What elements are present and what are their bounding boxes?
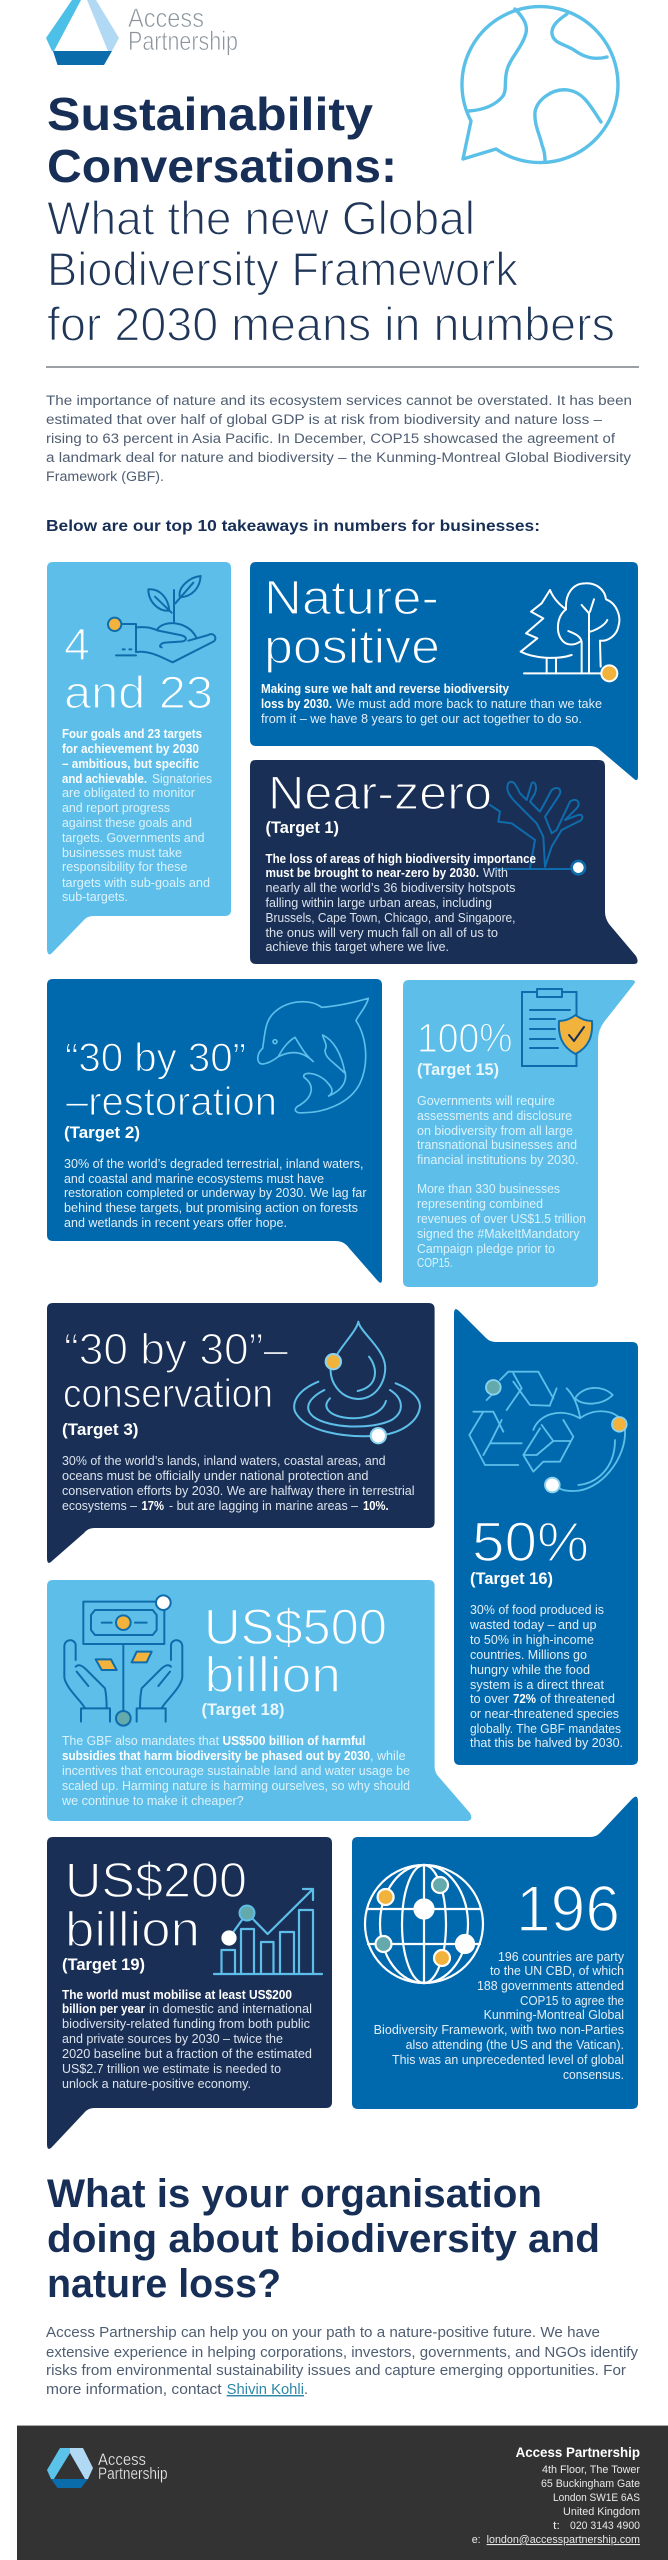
- heading: 30 by 30 restoration: –restoration: [66, 1080, 277, 1124]
- body text: and coastal and marine ecosystems must have: [64, 1172, 324, 1186]
- body text: 72%: [513, 1692, 536, 1706]
- body text: [266, 852, 536, 954]
- icon: globe with nodes: [365, 1865, 483, 1983]
- intro paragraph: a landmark deal for nature and biodiversity – the Kunming-Montreal Global Biodiversity: [46, 450, 631, 465]
- body text: in domestic and international: [149, 2002, 312, 2016]
- body text: achieve this target where we live.: [266, 940, 449, 954]
- body text: Campaign pledge prior to: [417, 1242, 555, 1256]
- title: What the new Global: [47, 192, 475, 244]
- body text: are obligated to monitor: [62, 786, 195, 800]
- body text: 10%.: [363, 1499, 389, 1513]
- body text: businesses must take: [62, 846, 182, 860]
- body text: nearly all the world’s 36 biodiversity hotspots: [266, 881, 516, 895]
- heading: Nature-positive: [264, 572, 440, 674]
- footer contact details: 65 Buckingham Gate: [541, 2478, 640, 2490]
- footer contact details: [472, 2445, 640, 2546]
- body text: also attending (the US and the Vatican).: [406, 2038, 624, 2052]
- icon: rising bar chart: [214, 1889, 322, 1974]
- body text: hungry while the food: [470, 1663, 590, 1677]
- panel: US$200 billion: [47, 1837, 332, 2149]
- body text: The GBF also mandates that: [62, 1734, 220, 1748]
- body text: 2020 baseline but a fraction of the estimated: [62, 2047, 312, 2061]
- body text: falling within large urban areas, including: [266, 896, 492, 910]
- icon: clipboard and shield: [522, 989, 592, 1066]
- target label: (Target 1): [266, 818, 339, 837]
- body text: [62, 727, 212, 904]
- heading: US$200 billion: US$200: [65, 1854, 247, 1908]
- heading: 4 and 23: 4: [64, 619, 90, 670]
- body text: and private sources by 2030 – twice the: [62, 2032, 283, 2046]
- body text: countries. Millions go: [470, 1648, 587, 1662]
- body text: behind these targets, but promising action on forests: [64, 1201, 358, 1215]
- icon: globe speech bubble: [462, 7, 618, 163]
- body text: to over: [470, 1692, 509, 1706]
- closing paragraph: extensive experience in helping corporations, investors, governments, and NGOs identify: [46, 2345, 639, 2361]
- footer contact details: 020 3143 4900: [570, 2520, 640, 2532]
- panel: 50%: [454, 1309, 638, 1765]
- body text: targets. Governments and: [62, 831, 205, 845]
- panel: Nature-positive: [250, 562, 638, 780]
- body text: The world must mobilise at least US$200: [62, 1988, 292, 2002]
- body text: restoration completed or underway by 2030. We lag far: [64, 1186, 366, 1200]
- body text: that this be halved by 2030.: [470, 1736, 623, 1750]
- body text: sub-targets.: [62, 890, 128, 904]
- title: [47, 88, 615, 350]
- heading: US$500 billion: [204, 1599, 387, 1703]
- body text: financial institutions by 2030.: [417, 1153, 579, 1167]
- heading: US$200 billion: [65, 1854, 247, 1957]
- heading: US$200 billion: billion: [65, 1903, 200, 1957]
- body text: to the UN CBD, of which: [490, 1964, 624, 1978]
- title: Biodiversity Framework: [47, 242, 518, 296]
- footer logo: Access: [98, 2450, 146, 2469]
- body text: 30% of food produced is: [470, 1603, 604, 1617]
- body text: Making sure we halt and reverse biodiversity: [261, 682, 509, 696]
- body text: for achievement by 2030: [62, 742, 199, 756]
- body text: and report progress: [62, 801, 170, 815]
- closing heading: doing about biodiversity and: [47, 2217, 600, 2261]
- target label: (Target 3): [62, 1420, 138, 1439]
- closing heading: What is your organisation: [47, 2172, 542, 2216]
- body text: [64, 1157, 366, 1230]
- footer contact details: Access Partnership: [516, 2445, 640, 2460]
- body text: incentives that encourage sustainable land and water usage be: [62, 1764, 410, 1778]
- body text: 30% of the world’s lands, inland waters, coastal areas, and: [62, 1454, 386, 1468]
- title: Sustainability: [47, 88, 373, 140]
- body text: [417, 1094, 586, 1270]
- body text: to 50% in high-income: [470, 1633, 594, 1647]
- body text: [469, 1603, 623, 1750]
- panel: 4 and 23: [47, 562, 231, 954]
- body text: Four goals and 23 targets: [62, 727, 202, 741]
- body text: we continue to make it cheaper?: [61, 1794, 244, 1808]
- body text: 30% of the world’s degraded terrestrial, inland waters,: [64, 1157, 364, 1171]
- body text: and wetlands in recent years offer hope.: [64, 1216, 287, 1230]
- target label: (Target 19): [62, 1955, 145, 1974]
- heading: 30 by 30 conservation: conservation: [63, 1372, 273, 1416]
- body text: Brussels, Cape Town, Chicago, and Singapore,: [266, 911, 516, 925]
- closing paragraph: more information, contact: [46, 2382, 222, 2398]
- body text: – ambitious, but specific: [62, 757, 199, 771]
- logo: Access Partnership: [46, 0, 238, 65]
- intro paragraph: [46, 393, 632, 484]
- body text: Governments will require: [417, 1094, 555, 1108]
- heading: US$500 billion: US$500: [204, 1599, 387, 1655]
- body text: biodiversity-related funding from both public: [62, 2017, 310, 2031]
- heading: US$500 billion: billion: [204, 1647, 341, 1703]
- panel: 100%: [403, 980, 635, 1287]
- body text: representing combined: [417, 1197, 543, 1211]
- footer contact details: 4th Floor, The Tower: [542, 2464, 640, 2476]
- body text: With: [483, 866, 508, 880]
- body text: billion per year: [62, 2002, 145, 2016]
- body text: [61, 1734, 410, 1808]
- body text: conservation efforts by 2030. We are halfway there in terrestrial: [62, 1484, 415, 1498]
- icon: trees: [521, 583, 619, 681]
- body text: the onus will very much fall on all of us to: [266, 926, 498, 940]
- closing paragraph: .: [304, 2382, 308, 2398]
- target label: (Target 2): [64, 1123, 140, 1142]
- footer contact details: t:: [553, 2520, 560, 2532]
- footer contact details: e:: [472, 2534, 481, 2546]
- body text: Biodiversity Framework, with two non-Parties: [374, 2023, 624, 2037]
- body text: 17%: [142, 1499, 164, 1513]
- logo: Access Partnership: Access: [128, 3, 204, 33]
- footer logo: Partnership: [98, 2464, 168, 2483]
- body text: targets with sub-goals and: [62, 876, 210, 890]
- heading: Near-zero: Near-zero: [268, 766, 492, 819]
- heading: 30 by 30 conservation: [63, 1325, 289, 1416]
- body text: scaled up. Harming nature is harming ourselves, so why should: [62, 1779, 410, 1793]
- title: Conversations:: [47, 140, 397, 192]
- icon: hands and money: [64, 1595, 182, 1726]
- body text: signed the #MakeItMandatory: [417, 1227, 580, 1241]
- heading: 196: 196: [516, 1872, 620, 1945]
- body text: responsibility for these: [62, 860, 188, 874]
- body text: COP15 to agree the: [520, 1994, 624, 2008]
- body text: [374, 1950, 625, 2082]
- closing paragraph: Access Partnership can help you on your path to a nature-positive future. We have: [46, 2325, 600, 2341]
- body text: subsidies that harm biodiversity be phased out by 2030: [62, 1749, 370, 1763]
- body text: This was an unprecedented level of global: [392, 2053, 624, 2067]
- body text: system is a direct threat: [470, 1678, 605, 1692]
- icon: coral: [490, 782, 585, 874]
- body text: 188 governments attended: [477, 1979, 624, 1993]
- body text: Kunming-Montreal Global: [484, 2008, 624, 2022]
- heading: 30 by 30 conservation: “30 by 30”–: [64, 1325, 289, 1374]
- body text: ecosystems –: [62, 1499, 137, 1513]
- body text: globally. The GBF mandates: [470, 1722, 621, 1736]
- body text: More than 330 businesses: [417, 1182, 560, 1196]
- body text: and achievable.: [62, 772, 147, 786]
- heading: 100%: 100%: [417, 1015, 512, 1061]
- footer logo: [47, 2448, 168, 2488]
- body text: assessments and disclosure: [417, 1109, 572, 1123]
- closing heading: nature loss?: [47, 2262, 281, 2306]
- closing heading: [47, 2172, 600, 2306]
- footer: [17, 2425, 668, 2560]
- logo: Access Partnership: Partnership: [128, 26, 238, 56]
- closing paragraph: Shivin Kohli: [227, 2382, 304, 2398]
- body text: unlock a nature-positive economy.: [62, 2077, 251, 2091]
- heading: Nature-positive: positive: [264, 621, 440, 674]
- body text: wasted today – and up: [469, 1618, 597, 1632]
- intro paragraph: rising to 63 percent in Asia Pacific. In December, COP15 showcased the agreement of: [46, 431, 615, 446]
- body text: US$500 billion of harmful: [222, 1734, 366, 1748]
- body text: oceans must be officially under national protection and: [62, 1469, 369, 1483]
- body text: [62, 1454, 415, 1513]
- body text: revenues of over US$1.5 trillion: [417, 1212, 586, 1226]
- body text: must be brought to near-zero by 2030.: [266, 866, 479, 880]
- body text: 196 countries are party: [498, 1950, 625, 1964]
- icon: dolphin: [258, 998, 368, 1113]
- closing paragraph: risks from environmental sustainability issues and capture emerging opportunities. For: [46, 2363, 626, 2379]
- body text: [62, 1988, 312, 2091]
- body text: against these goals and: [62, 816, 192, 830]
- heading: 4 and 23: and 23: [64, 667, 213, 718]
- icon: recycling and apple: [469, 1372, 627, 1492]
- body text: or near-threatened species: [470, 1707, 619, 1721]
- body text: The loss of areas of high biodiversity importance: [266, 852, 536, 866]
- body text: We must add more back to nature than we take: [336, 697, 602, 711]
- icon: hand holding plant: [108, 576, 215, 662]
- panel: Near-zero: [250, 760, 638, 964]
- body text: [261, 682, 602, 726]
- footer contact details: London SW1E 6AS: [553, 2492, 640, 2504]
- body text: Signatories: [152, 772, 212, 786]
- heading: 50%: 50%: [472, 1510, 589, 1573]
- body text: from it – we have 8 years to get our act together to do so.: [261, 712, 582, 726]
- body text: , while: [370, 1749, 406, 1763]
- panel: 30 by 30 restoration: [47, 979, 382, 1283]
- intro paragraph: estimated that over half of global GDP is at risk from biodiversity and nature loss –: [46, 412, 603, 427]
- intro paragraph: Framework (GBF).: [46, 469, 164, 484]
- panel: US$500 billion: [47, 1580, 471, 1821]
- heading: Nature-positive: Nature-: [264, 572, 439, 625]
- panel: 30 by 30 conservation: [47, 1303, 435, 1563]
- body text: consensus.: [563, 2068, 624, 2082]
- panel: 196: [352, 1797, 638, 2109]
- body text: - but are lagging in marine areas –: [169, 1499, 358, 1513]
- intro paragraph: The importance of nature and its ecosystem services cannot be overstated. It has been: [46, 393, 632, 408]
- icon: water drop: [294, 1322, 420, 1443]
- target label: (Target 18): [202, 1700, 284, 1719]
- body text: transnational businesses and: [417, 1138, 577, 1152]
- title: for 2030 means in numbers: [47, 298, 615, 350]
- target label: (Target 15): [417, 1060, 499, 1079]
- closing paragraph: [46, 2325, 639, 2398]
- body text: US$2.7 trillion we estimate is needed to: [62, 2062, 281, 2076]
- body text: loss by 2030.: [261, 697, 332, 711]
- heading: 30 by 30 restoration: “30 by 30”: [65, 1036, 246, 1080]
- subheading: Below are our top 10 takeaways in numbers for businesses:: [46, 518, 540, 535]
- target label: (Target 16): [470, 1569, 553, 1588]
- body text: on biodiversity from all large: [417, 1124, 573, 1138]
- heading: 30 by 30 restoration: [65, 1036, 277, 1124]
- footer contact details: london@accesspartnership.com: [487, 2534, 640, 2546]
- body text: COP15.: [417, 1256, 452, 1270]
- footer contact details: United Kingdom: [563, 2506, 640, 2518]
- heading: 4 and 23: [64, 619, 213, 718]
- body text: of threatened: [540, 1692, 615, 1706]
